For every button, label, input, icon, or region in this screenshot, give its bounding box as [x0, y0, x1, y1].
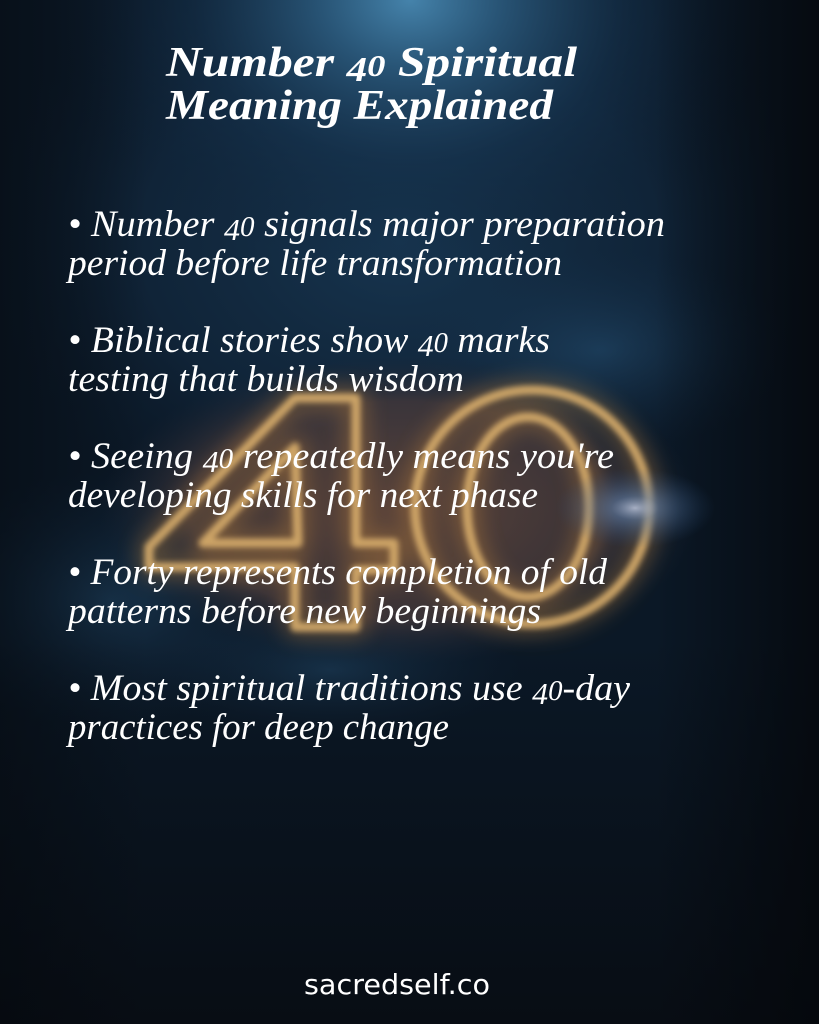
- bullet: biblical stories: testing that builds wisdom: [68, 359, 464, 400]
- bullet: biblical stories: • Biblical stories show: [68, 320, 401, 361]
- lens flare: [555, 468, 715, 548]
- bullet: seeing 40 repeatedly: [68, 436, 614, 516]
- bullet: preparation period: 0: [240, 212, 255, 243]
- bullet: seeing 40 repeatedly: 0: [219, 444, 233, 475]
- bullet: seeing 40 repeatedly: 4: [203, 444, 219, 479]
- bullet: seeing 40 repeatedly: developing skills for next phase: [68, 475, 538, 516]
- title: [165, 40, 577, 129]
- bullet: preparation period: 4: [224, 212, 240, 247]
- bullet: preparation period: signals major preparation: [264, 204, 651, 245]
- title: Spiritual: [396, 40, 548, 86]
- bullet: biblical stories: 4: [418, 328, 434, 363]
- bullet: seeing 40 repeatedly: • Seeing: [68, 436, 189, 477]
- bullet: preparation period: period before life transformation: [65, 243, 562, 284]
- bullet: seeing 40 repeatedly: repeatedly means you're: [242, 436, 601, 477]
- bullet: biblical stories: 0: [434, 328, 448, 359]
- bullet: forty represents completion: [65, 552, 607, 632]
- footer: site name: sacredself.co: [304, 968, 490, 1001]
- bullet: biblical stories: marks: [457, 320, 548, 361]
- bullet: forty represents completion: patterns before new beginnings: [65, 591, 541, 632]
- bullet: spiritual traditions: [65, 668, 631, 748]
- bullet: spiritual traditions: 0: [548, 676, 562, 707]
- bullet: preparation period: • Number: [68, 204, 209, 245]
- title: 0: [367, 48, 385, 83]
- bullet: forty represents completion: • Forty represents completion of old: [68, 552, 607, 593]
- bullet: preparation period: [65, 204, 665, 284]
- glowing neon number 40: [100, 355, 715, 665]
- bullet: spiritual traditions: practices for deep change: [65, 707, 449, 748]
- title: Number: [166, 40, 308, 86]
- bullet: biblical stories: [68, 320, 550, 400]
- bullet: spiritual traditions: -day: [562, 668, 628, 709]
- bullet: spiritual traditions: • Most spiritual traditions use: [68, 668, 511, 709]
- title: 4: [345, 50, 367, 89]
- bullet: spiritual traditions: 4: [532, 676, 548, 711]
- title: Meaning Explained: [165, 83, 554, 129]
